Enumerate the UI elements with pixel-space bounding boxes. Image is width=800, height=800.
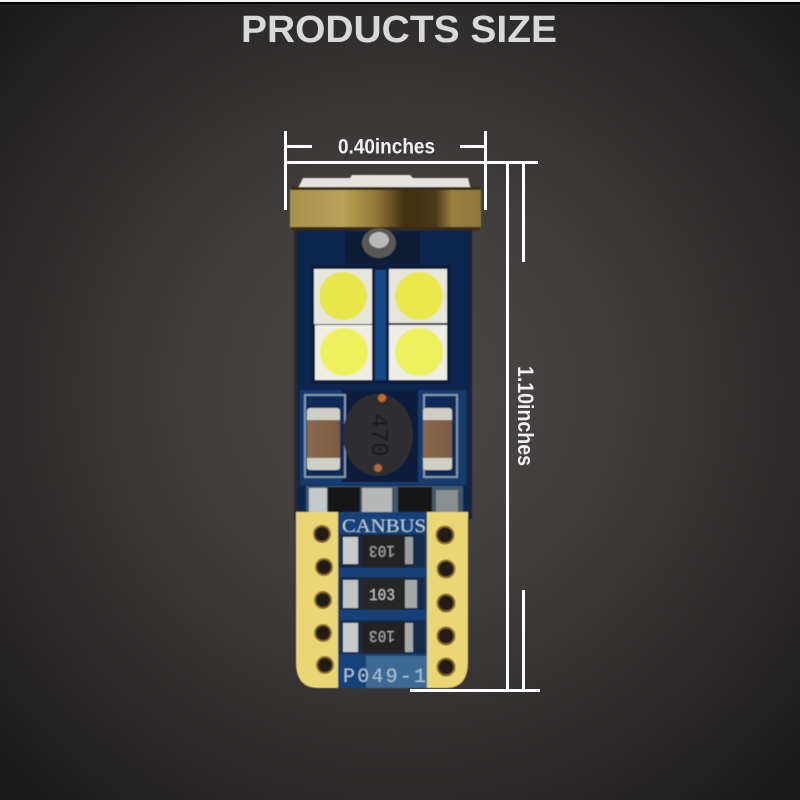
resistors: [343, 535, 417, 653]
left capacitor: [305, 395, 345, 477]
resistors: 103: [369, 625, 395, 644]
title: PRODUCTS SIZE: [241, 9, 557, 51]
LED surround: [311, 265, 451, 384]
resistors: 103: [369, 587, 395, 606]
height label: 1.10inches: [513, 366, 538, 466]
width dimension: [284, 131, 538, 210]
LED chips: [314, 269, 447, 380]
circuit board: [294, 229, 472, 519]
canbus label: CANBUS: [342, 516, 426, 537]
height dimension: [410, 162, 540, 692]
resistors: 103: [369, 540, 395, 559]
width label: 0.40inches: [338, 136, 435, 158]
solder joint: [362, 228, 396, 258]
white base top: [297, 175, 471, 190]
transistor row: [306, 486, 463, 514]
LED bulb: [290, 175, 481, 689]
inductor: 470: [364, 413, 391, 457]
dark shadow band: [345, 232, 420, 264]
gold pads: [296, 512, 338, 688]
ring: [290, 188, 481, 229]
right capacitor: [423, 395, 457, 477]
lower board blue: [300, 390, 466, 485]
inductor: [343, 394, 413, 476]
pad holes: [314, 526, 454, 676]
board code: P049-1: [343, 666, 426, 689]
centre board: [338, 512, 427, 688]
top rule: [0, 0, 800, 4]
